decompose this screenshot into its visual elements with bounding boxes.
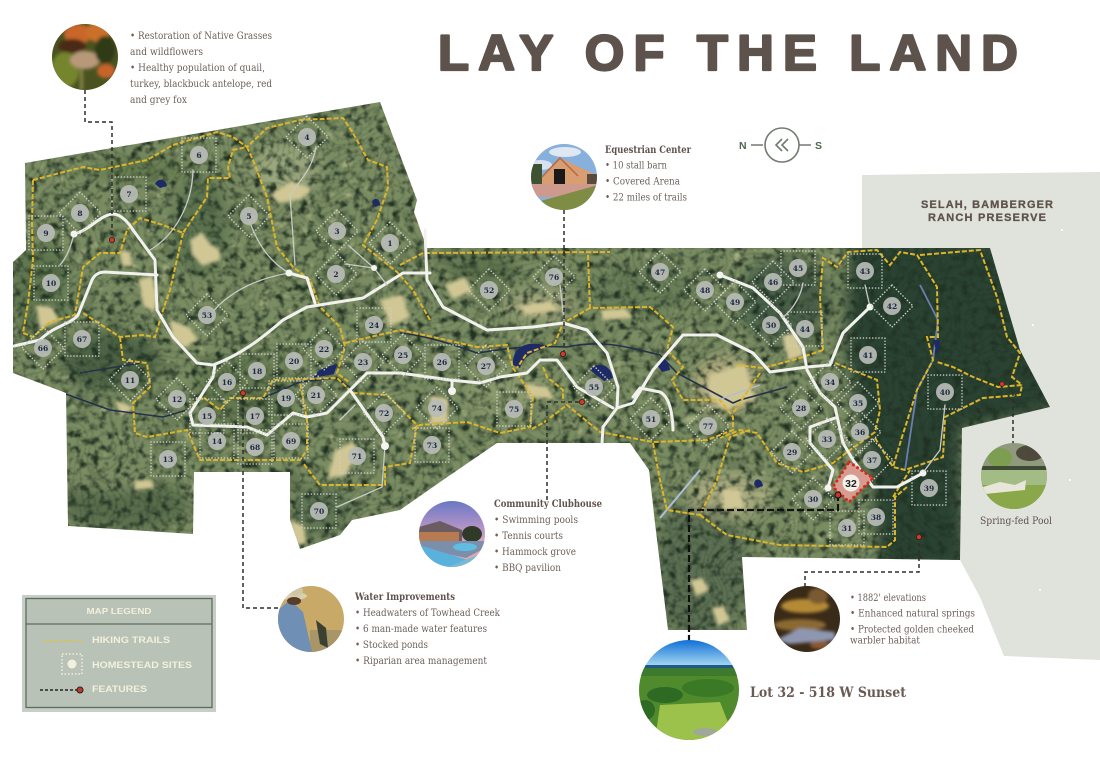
site 34	[809, 361, 851, 403]
elevation and springs text: warbler habitat	[850, 636, 920, 646]
preserve area: Selah, Bamberger Ranch	[862, 172, 1100, 660]
compass: N	[739, 140, 747, 152]
creek	[63, 180, 940, 518]
site 28	[780, 387, 822, 429]
site 75	[497, 392, 531, 426]
site 24: 24	[369, 321, 379, 330]
site 46	[752, 261, 794, 303]
site 36: 36	[855, 428, 865, 437]
site 29	[771, 431, 813, 473]
site 22	[303, 328, 345, 370]
site 6: 6	[196, 151, 202, 160]
site 9: 9	[43, 229, 49, 238]
water improvements text	[354, 592, 501, 667]
site 73	[415, 428, 449, 462]
site 21	[295, 374, 337, 416]
community clubhouse text: • Tennis courts	[494, 531, 563, 542]
legend: hiking trails: HIKING TRAILS	[92, 635, 170, 646]
site 20: 20	[289, 357, 299, 366]
equestrian center text	[605, 145, 692, 204]
site 25	[382, 334, 424, 376]
site 21: 21	[311, 391, 321, 400]
site 10: 10	[46, 279, 56, 288]
site 3: 3	[334, 227, 340, 236]
site 52: 52	[484, 286, 494, 295]
elevation and springs text: • Enhanced natural springs	[850, 608, 975, 620]
photo: barn	[528, 143, 598, 212]
leader: lot 32	[689, 492, 841, 642]
spring-fed pool label: Spring-fed Pool	[980, 516, 1052, 527]
site 33	[806, 418, 848, 460]
site 12	[156, 378, 198, 420]
site 39	[912, 471, 946, 505]
ponds	[513, 344, 547, 368]
site 6	[182, 138, 216, 172]
site 11: 11	[125, 376, 135, 385]
site 55	[573, 366, 615, 408]
site 42	[871, 285, 913, 327]
site 68: 68	[250, 443, 260, 452]
community clubhouse text: • BBQ pavilion	[494, 563, 561, 574]
site 41	[851, 338, 885, 372]
site 38	[859, 500, 893, 534]
site 23: 23	[358, 358, 368, 367]
title: LAY OF THE LAND	[438, 25, 1027, 81]
site 50	[750, 304, 792, 346]
photo: spring-fed pool	[981, 443, 1047, 509]
site 28: 28	[796, 404, 806, 413]
site 8: 8	[77, 209, 83, 218]
site 76	[533, 256, 575, 298]
leader: spring-fed pool	[1000, 382, 1013, 445]
site 48	[684, 269, 726, 311]
site 23	[342, 341, 384, 383]
site 43: 43	[860, 267, 870, 276]
community clubhouse text	[494, 499, 602, 574]
site 46: 46	[768, 278, 778, 287]
site 5	[228, 195, 270, 237]
site 37: 37	[867, 456, 877, 465]
legend heading: MAP LEGEND	[86, 606, 152, 616]
site 53	[186, 294, 228, 336]
water improvements text: Water Improvements	[354, 592, 455, 603]
site 31	[830, 511, 864, 545]
site 66: 66	[38, 344, 48, 353]
site 8	[59, 192, 101, 234]
site 3	[316, 210, 358, 252]
elevation and springs text: • 1882' elevations	[850, 593, 926, 604]
site 67	[65, 322, 99, 356]
water improvements text: • 6 man-made water features	[355, 624, 487, 635]
leader: water improvements	[240, 390, 278, 608]
water improvements text: • Riparian area management	[355, 656, 487, 667]
equestrian center text: • Covered Arena	[605, 176, 680, 188]
site 20	[277, 344, 311, 378]
wildlife text	[130, 31, 273, 106]
site 2: 2	[333, 270, 339, 279]
site 27: 27	[481, 362, 491, 371]
roads	[14, 147, 945, 507]
site 45: 45	[793, 264, 803, 273]
site 2	[315, 253, 357, 295]
site 15: 15	[202, 412, 212, 421]
site 9	[29, 216, 63, 250]
site 47: 47	[655, 268, 665, 277]
compass	[739, 128, 822, 162]
map legend	[22, 595, 216, 712]
equestrian center text: • 10 stall barn	[605, 160, 667, 172]
site 1: 1	[387, 239, 393, 248]
site 36	[839, 411, 881, 453]
wildlife text: and grey fox	[130, 95, 187, 106]
site 4	[286, 116, 328, 158]
community clubhouse text: • Swimming pools	[494, 515, 578, 526]
site 27	[465, 345, 507, 387]
site 72	[363, 392, 405, 434]
site 35	[837, 382, 879, 424]
site 41: 41	[863, 351, 873, 360]
wildlife text: and wildflowers	[130, 47, 203, 58]
photo: butterflies on flowers	[52, 24, 118, 90]
site 49: 49	[730, 298, 740, 307]
site 35: 35	[853, 399, 863, 408]
equestrian center text: • 22 miles of trails	[605, 192, 687, 204]
site 24	[357, 308, 391, 342]
site 15	[190, 399, 224, 433]
site 50: 50	[766, 321, 776, 330]
site 18: 18	[252, 367, 262, 376]
site 17	[238, 399, 272, 433]
site 26: 26	[437, 358, 447, 367]
site 70	[302, 494, 336, 528]
site 67: 67	[77, 335, 87, 344]
lot 32 highlighted parcel: 32	[845, 478, 857, 490]
site 39: 39	[924, 484, 934, 493]
equestrian center text: Equestrian Center	[605, 145, 692, 156]
wildlife text: turkey, blackbuck antelope, red	[130, 79, 273, 90]
site 72: 72	[379, 409, 389, 418]
site 40	[928, 375, 962, 409]
site 4: 4	[304, 133, 310, 142]
site 30: 30	[808, 495, 818, 504]
site 53: 53	[202, 311, 212, 320]
site 75: 75	[509, 405, 519, 414]
site 74: 74	[432, 404, 442, 413]
site 5: 5	[246, 212, 252, 221]
site 49	[714, 281, 756, 323]
site 55: 55	[589, 383, 599, 392]
water improvements text: • Headwaters of Towhead Creek	[355, 608, 501, 619]
site 1	[369, 222, 411, 264]
legend: homestead sites	[62, 654, 192, 674]
site 19	[269, 381, 303, 415]
site 69	[274, 424, 308, 458]
site 38: 38	[871, 513, 881, 522]
photo: lot 32 aerial	[635, 640, 739, 740]
site 17: 17	[250, 412, 260, 421]
homestead sites	[22, 116, 962, 545]
photo: waterfall	[774, 586, 840, 652]
site 33: 33	[822, 435, 832, 444]
site 12: 12	[172, 395, 182, 404]
legend: homestead sites: HOMESTEAD SITES	[92, 660, 192, 671]
lot 32 highlighted parcel	[833, 462, 873, 502]
site 37	[851, 439, 893, 481]
site 25: 25	[398, 351, 408, 360]
site 76: 76	[549, 273, 559, 282]
site 47	[639, 251, 681, 293]
leader: equestrian center	[560, 210, 566, 357]
site 44: 44	[800, 325, 810, 334]
site 51	[630, 398, 672, 440]
wildlife text: • Restoration of Native Grasses	[130, 31, 272, 42]
site 16: 16	[222, 378, 232, 387]
site 77	[687, 405, 729, 447]
site 31: 31	[842, 524, 852, 533]
site 30	[792, 478, 834, 520]
legend: hiking trails	[44, 635, 170, 646]
site 14	[200, 424, 234, 458]
site 44	[788, 312, 822, 346]
site 7: 7	[126, 190, 132, 199]
photo: clubhouse and pool	[419, 501, 485, 570]
leader: wildlife	[85, 90, 115, 243]
site 42: 42	[887, 302, 897, 311]
sand clearings	[36, 181, 804, 626]
site 43	[848, 254, 882, 288]
compass: S	[815, 140, 822, 152]
site 69: 69	[286, 437, 296, 446]
community clubhouse text: Community Clubhouse	[494, 499, 602, 510]
site 52	[468, 269, 510, 311]
site 51: 51	[646, 415, 656, 424]
site 11	[109, 359, 151, 401]
site 22: 22	[319, 345, 329, 354]
site 74	[416, 387, 458, 429]
legend: features: FEATURES	[92, 684, 147, 695]
leader: elevations	[805, 534, 922, 587]
site 14: 14	[212, 437, 222, 446]
site 13: 13	[163, 455, 173, 464]
hiking trails	[23, 118, 1022, 547]
water improvements text: • Stocked ponds	[355, 640, 428, 651]
site 71	[340, 439, 374, 473]
site 48: 48	[700, 286, 710, 295]
site 70: 70	[314, 507, 324, 516]
site 77: 77	[703, 422, 713, 431]
site 34: 34	[825, 378, 835, 387]
leader: community clubhouse	[547, 399, 585, 500]
preserve label: RANCH PRESERVE	[928, 212, 1046, 224]
ranch map	[12, 102, 1050, 630]
site 18	[240, 354, 274, 388]
site 66	[22, 327, 64, 369]
elevation and springs text	[850, 593, 975, 646]
lot 32 label: Lot 32 - 518 W Sunset	[750, 685, 906, 701]
site 45	[781, 251, 815, 285]
photo: man holding fish	[278, 586, 344, 652]
legend: features	[40, 684, 147, 695]
site 71: 71	[352, 452, 362, 461]
site 7	[112, 177, 146, 211]
elevation and springs text: • Protected golden cheeked	[850, 624, 975, 636]
site 68	[238, 430, 272, 464]
site 40: 40	[940, 388, 950, 397]
site 26	[425, 345, 459, 379]
community clubhouse text: • Hammock grove	[494, 547, 576, 558]
site 19: 19	[281, 394, 291, 403]
preserve label: SELAH, BAMBERGER	[921, 199, 1053, 211]
site 73: 73	[427, 441, 437, 450]
site 10	[34, 266, 68, 300]
site 13	[151, 442, 185, 476]
site 16	[206, 361, 248, 403]
preserve label	[921, 199, 1053, 224]
wildlife text: • Healthy population of quail,	[130, 63, 265, 74]
site 29: 29	[787, 448, 797, 457]
